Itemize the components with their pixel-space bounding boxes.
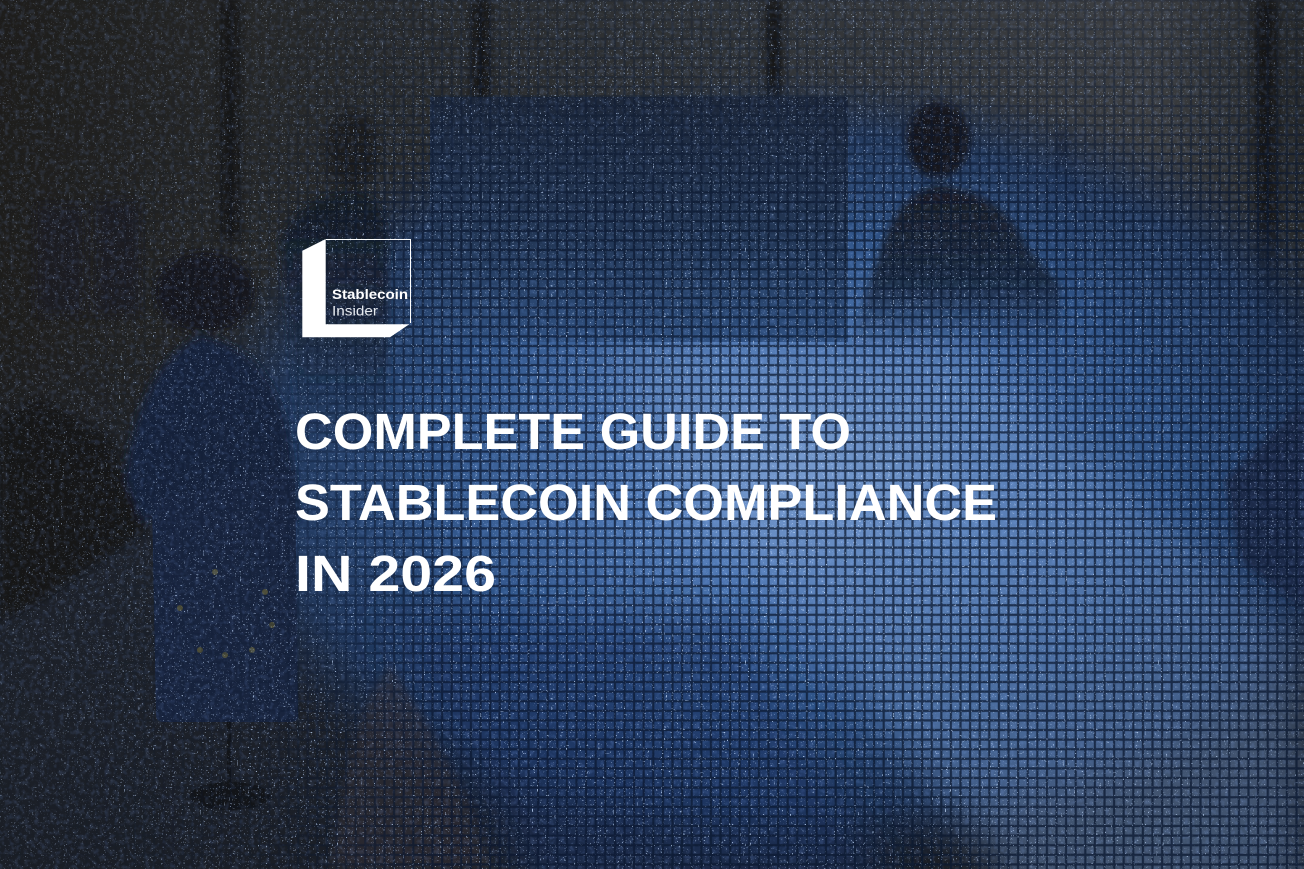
city skyline: [36, 120, 1085, 315]
light band across table: [600, 350, 1304, 869]
title line 1: COMPLETE GUIDE TO: [295, 403, 851, 460]
logo: Stablecoin Insider: [302, 239, 410, 337]
logo wordmark: Stablecoin: [332, 286, 408, 302]
logo mark: [302, 239, 409, 337]
title: [295, 403, 997, 602]
darker table front: [380, 620, 900, 869]
silhouettes: [0, 102, 1304, 620]
window mullions: [220, 0, 1277, 420]
logo sub-wordmark: Insider: [332, 302, 378, 318]
title line 2: STABLECOIN COMPLIANCE: [295, 474, 997, 531]
presentation screen: [430, 97, 848, 342]
foreground figure: [330, 665, 495, 869]
title line 3: IN 2026: [295, 545, 496, 602]
logo outline: [326, 240, 410, 323]
EU flag with stand: [152, 470, 298, 810]
